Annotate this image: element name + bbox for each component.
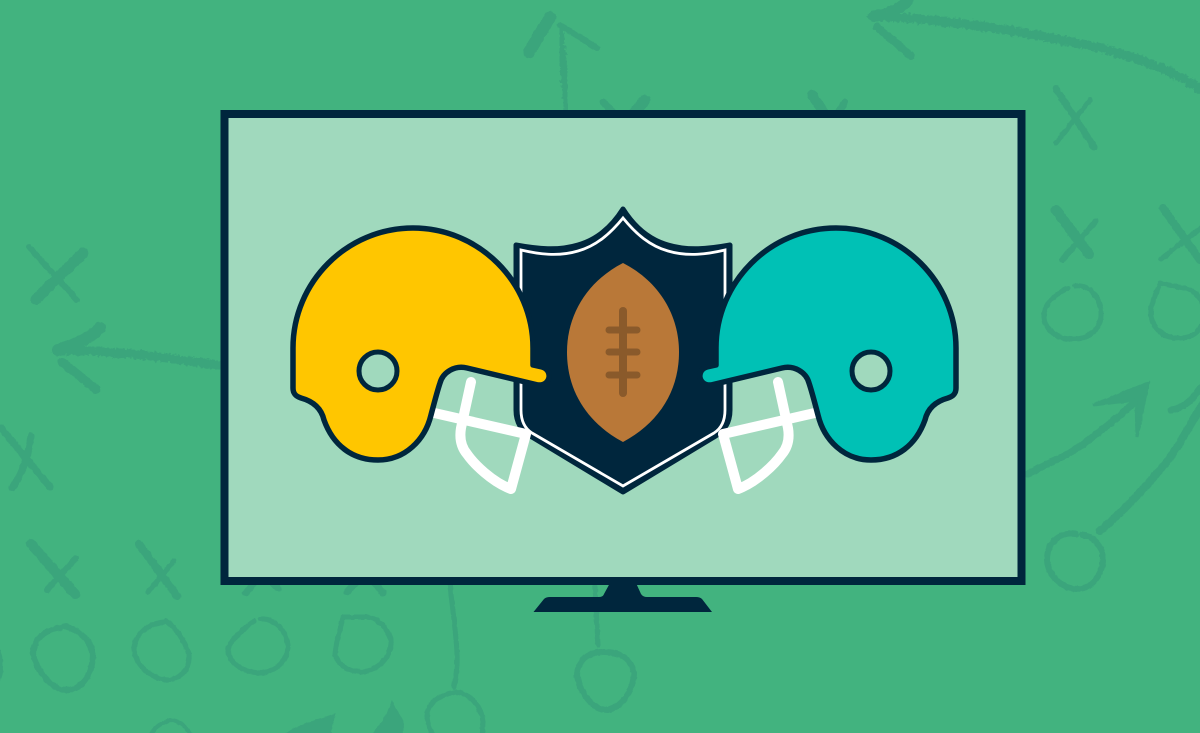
circle: bottom 1 <box>33 626 93 690</box>
circle: right 2 <box>1151 283 1200 338</box>
x mark: bottom 2 <box>139 544 177 596</box>
tv screen <box>224 114 1022 581</box>
line: bottom centre right <box>595 586 598 645</box>
ear hole: teal helmet <box>852 352 890 390</box>
circle: bottom 3 <box>228 619 288 673</box>
helmet shell: yellow <box>293 228 549 460</box>
facemask: yellow helmet <box>430 382 526 489</box>
circle: bottom centre right <box>577 652 634 710</box>
television <box>224 114 1022 612</box>
x mark: right 1 <box>1056 89 1094 147</box>
arrow: left <box>56 328 222 389</box>
x mark: right 3 <box>1161 208 1200 260</box>
circle: bottom 2 <box>134 621 189 680</box>
x mark: right 2 <box>1056 210 1096 260</box>
helmet: yellow <box>293 228 549 489</box>
arrow: top centre <box>529 17 597 112</box>
ear hole: yellow helmet <box>359 352 397 390</box>
x mark: left 1 <box>29 247 83 300</box>
football <box>567 263 679 442</box>
shield body <box>516 209 730 492</box>
circle: right 3 <box>1047 534 1103 589</box>
arrow: right middle <box>1028 383 1148 474</box>
arrowheads: bottom <box>284 703 403 733</box>
helmet shell: teal <box>700 228 956 460</box>
x mark: left 2 <box>1 428 50 488</box>
football laces <box>609 311 637 393</box>
facemask: teal helmet <box>723 382 819 489</box>
helmet: teal <box>700 228 956 489</box>
tv stand <box>534 583 712 612</box>
circle: bottom centre left <box>427 692 483 733</box>
x marks behind the screen <box>246 95 850 593</box>
line: bottom centre left <box>450 586 457 687</box>
shield white inner line <box>521 218 725 486</box>
circle: left edge partial <box>0 650 1 680</box>
circle: bottom 4 <box>335 617 391 672</box>
shield <box>516 209 730 492</box>
arrow: top right curved <box>872 1 1200 90</box>
circle: bottom partial <box>148 720 194 733</box>
x mark: bottom 1 <box>31 544 76 594</box>
circle: right 1 <box>1044 286 1101 339</box>
arrow: right lower <box>1100 388 1200 531</box>
